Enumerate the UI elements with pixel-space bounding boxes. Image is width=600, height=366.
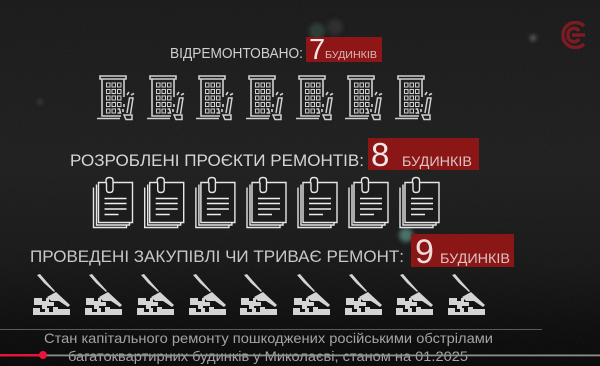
row 1 heading: ВІДРЕМОНТОВАНО: [170,46,303,62]
badge: 7 будинків: 7 [309,34,325,66]
video progress bar [0,351,600,359]
caption [0,329,542,364]
row 3 heading: ПРОВЕДЕНІ ЗАКУПІВЛІ ЧИ ТРИВАЄ РЕМОНТ: [30,248,404,266]
row 3 trowel and brick icons [33,274,485,315]
badge: 8 будинків [368,136,479,173]
badge: 9 будинків [411,233,514,271]
row 1 building icons [97,76,432,120]
row 2 heading [70,136,479,173]
badge: 8 будинків: 8 [371,136,389,173]
badge: 7 будинків: БУДИНКІВ [325,49,377,61]
row 2 document icons [94,178,439,228]
caption: багатоквартирних будинків у Миколаєві, станом на 01.2025 [68,348,468,364]
row 2 heading: РОЗРОБЛЕНІ ПРОЄКТИ РЕМОНТІВ: [70,152,364,170]
logo [563,23,585,48]
badge: 7 будинків [306,34,382,66]
caption: Стан капітального ремонту пошкоджених російськими обстрілами [44,330,493,346]
badge: 9 будинків: БУДИНКІВ [440,251,510,266]
row 1 heading [170,34,382,66]
badge: 8 будинків: БУДИНКІВ [402,154,472,169]
badge: 9 будинків: 9 [415,233,434,271]
decorative dust spots [38,19,536,242]
row 3 heading [30,233,514,271]
